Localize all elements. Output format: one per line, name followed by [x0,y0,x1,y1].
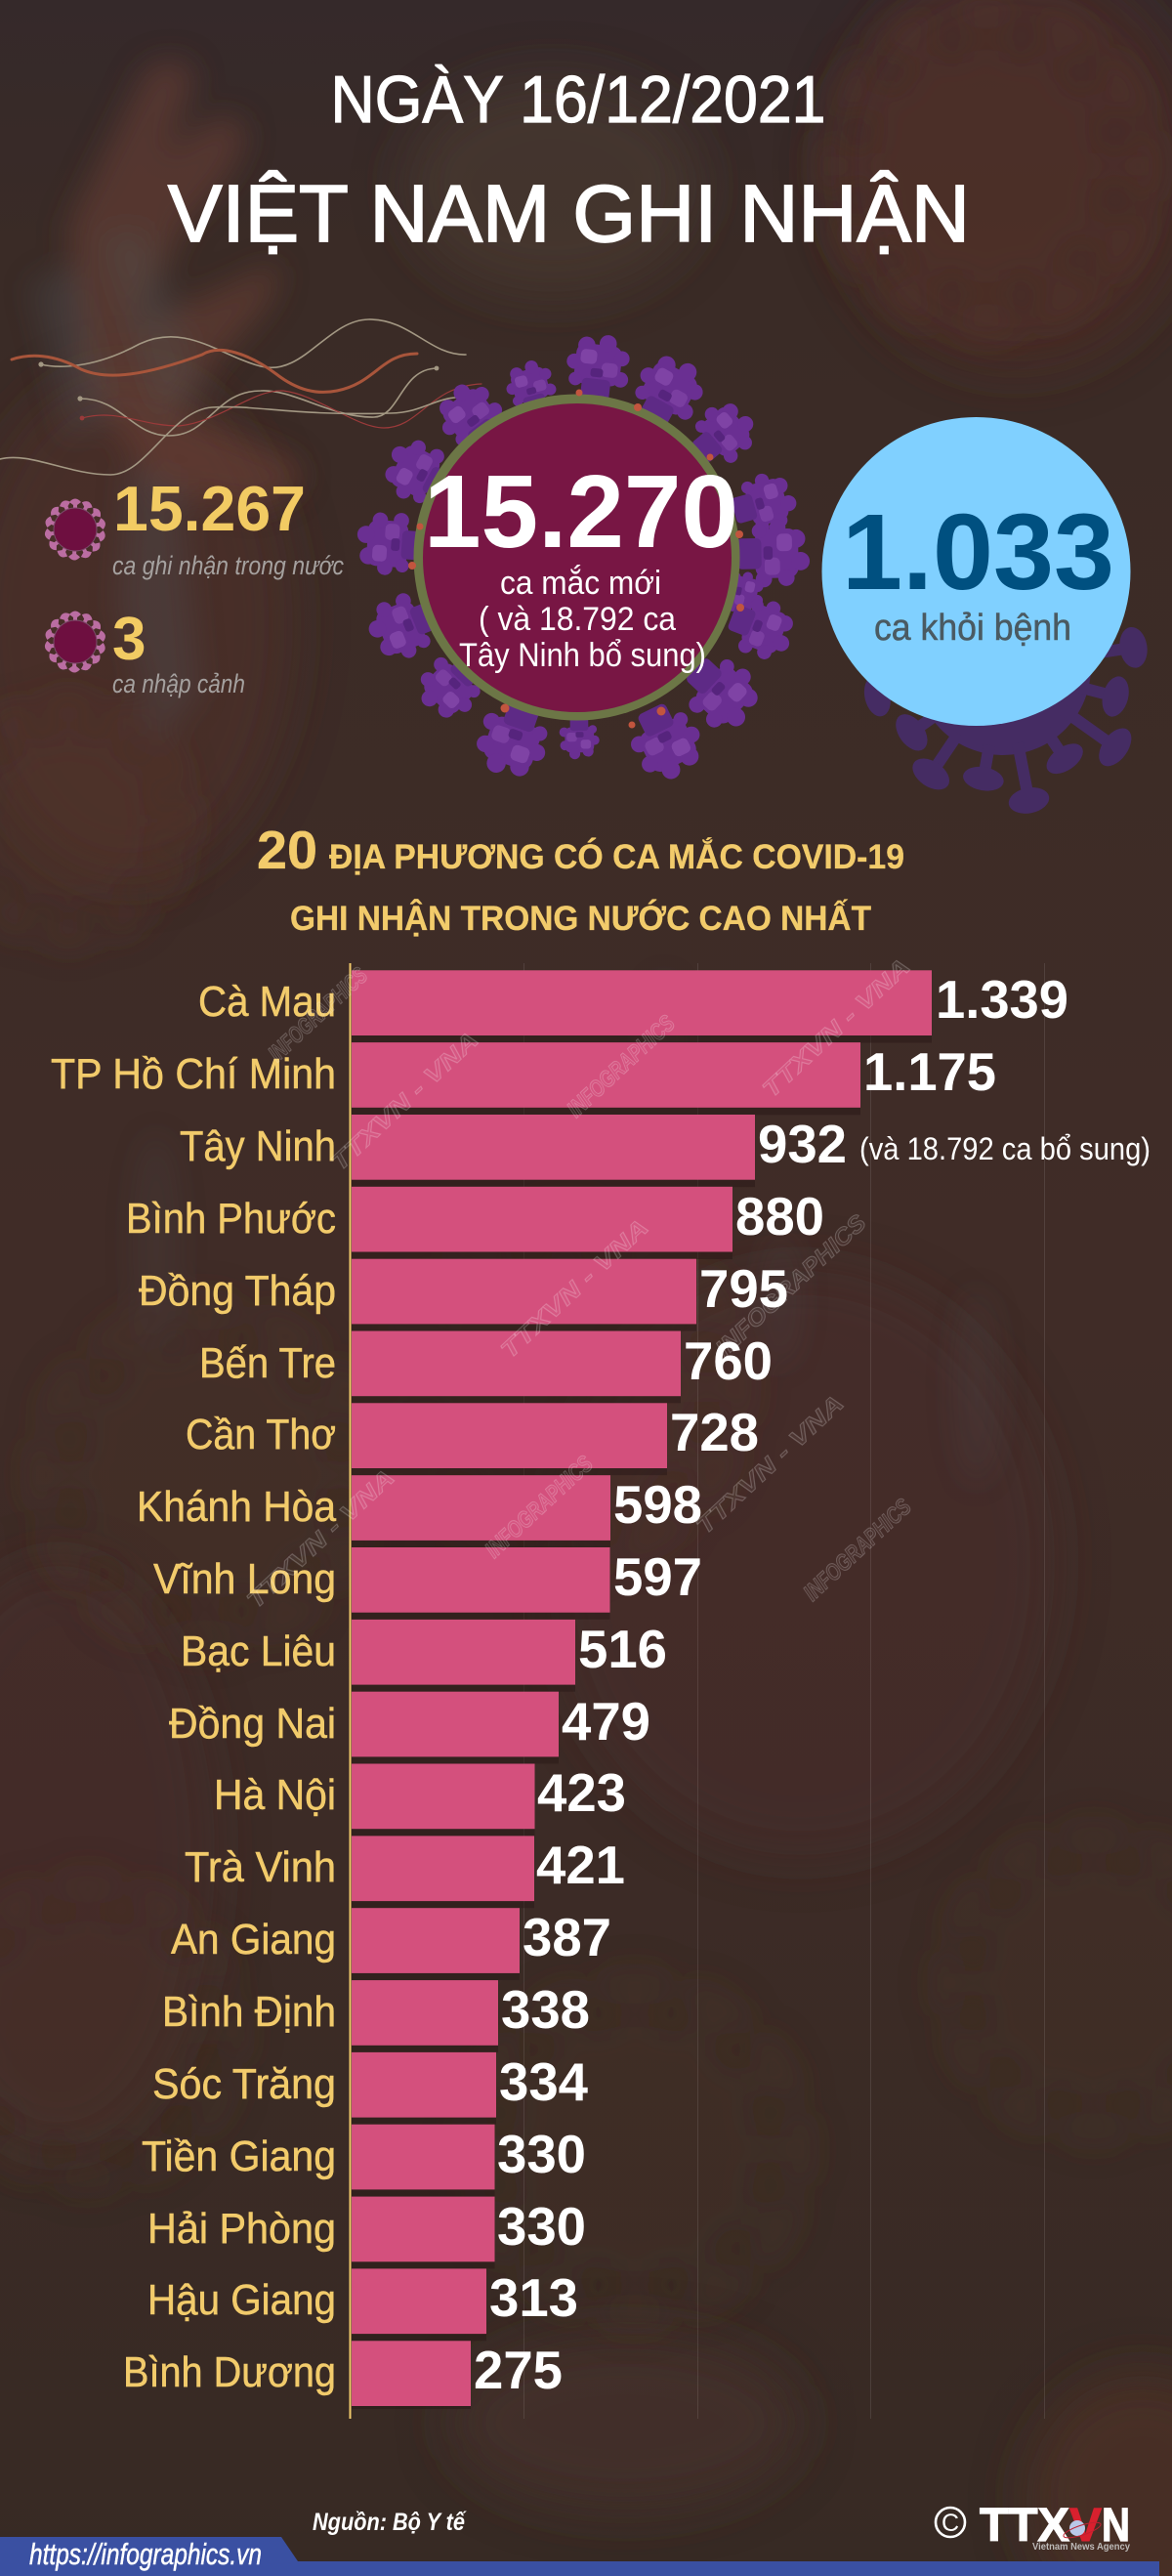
row: Trà Vinh: Trà Vinh [185,1843,336,1891]
chart heading line 1: ĐỊA PHƯƠNG CÓ CA MẮC COVID-19 [329,837,904,876]
agency watermarks: INFOGRAPHICS [563,1010,680,1122]
row: Bến Tre: Bến Tre [199,1339,336,1387]
row: Cần Thơ [186,1402,759,1475]
row: Bình Dương: 275 [474,2340,563,2400]
tagline: Vietnam News Agency [1032,2542,1130,2553]
wordmark: N [1102,2500,1130,2552]
virus spikes [355,331,811,789]
row: Bạc Liêu [181,1619,667,1692]
icon: purple virus silhouette [860,579,1150,817]
row: Hà Nội [214,1762,626,1836]
agency watermarks: TTXVN - VNA [691,1390,849,1540]
row: Bạc Liêu: 516 [578,1619,667,1679]
agency watermarks: INFOGRAPHICS [711,1209,871,1362]
row: An Giang [171,1907,611,1980]
big number: 15.270 [424,454,738,570]
row: Vĩnh Long [153,1546,702,1620]
icon: small virus [44,612,106,673]
row: Bình Định: 338 [501,1979,590,2040]
row: Đồng Nai: 479 [562,1691,650,1752]
main virus with new cases [355,331,811,789]
row: Vĩnh Long: Vĩnh Long [153,1555,336,1603]
row: Bình Phước: 880 [735,1186,824,1246]
row: TP Hồ Chí Minh [51,1041,996,1115]
main title: VIỆT NAM GHI NHẬN [168,168,970,259]
caption line 1: ca mắc mới [500,565,661,602]
row: Cà Mau: 1.339 [936,969,1068,1030]
row: Tây Ninh: 932 [758,1114,847,1174]
source note: Nguồn: Bộ Y tế [313,2509,467,2536]
chart heading line 1 [257,820,904,880]
chart heading line 1: 20 [257,820,317,880]
note: (và 18.792 ca bổ sung) [859,1131,1151,1166]
copyright mark: C [942,2510,959,2537]
row: Bình Định: Bình Định [162,1988,336,2036]
bar chart [51,963,1151,2419]
row: Bến Tre [199,1330,773,1403]
row: Bình Định [162,1979,590,2052]
row: Bình Phước [126,1186,824,1259]
row: Hà Nội: 423 [537,1762,626,1823]
date heading: NGÀY 16/12/2021 [330,63,826,137]
row: Bình Phước: Bình Phước [126,1195,336,1243]
row: Bình Dương: Bình Dương [123,2348,336,2396]
big number: 1.033 [842,492,1114,612]
row: Tây Ninh [180,1114,1151,1187]
row: Đồng Tháp: Đồng Tháp [139,1267,336,1315]
caption line 2: ( và 18.792 ca [479,601,676,638]
row: Hậu Giang: 313 [489,2267,578,2328]
agency watermarks: TTXVN - VNA [242,1464,399,1614]
caption line 3: Tây Ninh bổ sung) [459,637,706,674]
row: Đồng Nai [169,1691,650,1764]
agency watermarks: TTXVN - VNA [758,953,915,1103]
row: Trà Vinh: 421 [536,1835,625,1895]
row: Hậu Giang: Hậu Giang [147,2276,336,2324]
row: TP Hồ Chí Minh: 1.175 [863,1041,996,1102]
wordmark: V [1069,2500,1102,2552]
caption: ca ghi nhận trong nước [112,551,344,580]
row: Tây Ninh: Tây Ninh [180,1122,336,1170]
website url: https://infographics.vn [29,2537,262,2571]
row: Tiền Giang [142,2124,586,2196]
caption: ca khỏi bệnh [874,608,1071,649]
row: Sóc Trăng: Sóc Trăng [152,2060,336,2108]
virus body [423,403,732,712]
wordmark [980,2500,1130,2552]
icon: small virus [44,498,106,561]
virus membrane [414,395,740,721]
agency watermarks: TTXVN - VNA [496,1214,653,1364]
row: Sóc Trăng [152,2051,588,2125]
row: An Giang: An Giang [171,1916,336,1964]
row: An Giang: 387 [523,1907,611,1967]
row: Tiền Giang: 330 [497,2124,586,2184]
row: Cần Thơ: 728 [670,1402,759,1462]
row: Vĩnh Long: 597 [613,1546,702,1607]
row: Bạc Liêu: Bạc Liêu [181,1627,336,1675]
logo: TTXVN [936,2500,1130,2553]
value 15.267: 15.267 [113,473,306,544]
icon: blurred virus top left [68,61,302,508]
row: Đồng Tháp: 795 [699,1258,788,1319]
agency watermarks: INFOGRAPHICS [799,1494,916,1606]
row: Cà Mau [198,969,1068,1043]
wordmark: TTX [980,2500,1069,2552]
row: Bình Dương [123,2340,563,2409]
row: Khánh Hòa [137,1474,702,1547]
agency watermarks: INFOGRAPHICS [264,962,373,1067]
row: Tiền Giang: Tiền Giang [142,2133,336,2180]
row: Khánh Hòa: Khánh Hòa [137,1483,336,1531]
caption: ca nhập cảnh [112,669,245,698]
decorative flowing strands [0,319,481,475]
row: Hậu Giang [147,2267,578,2341]
agency watermarks: INFOGRAPHICS [481,1451,598,1563]
agency watermarks: TTXVN - VNA [326,1027,483,1176]
agency watermarks [242,953,916,1614]
value 3: 3 [112,606,146,673]
row: Hải Phòng [147,2196,586,2268]
chart heading line 2: GHI NHẬN TRONG NƯỚC CAO NHẤT [290,899,871,938]
stat: imported cases [44,606,245,698]
row: Đồng Tháp [139,1258,788,1330]
row: Hải Phòng: 330 [497,2196,586,2257]
row: TP Hồ Chí Minh: TP Hồ Chí Minh [51,1050,336,1098]
row: Cần Thơ: Cần Thơ [186,1411,336,1458]
row: Hà Nội: Hà Nội [214,1771,336,1819]
blue circle [822,417,1131,726]
footer bar [0,2537,1159,2576]
row: Sóc Trăng: 334 [499,2051,588,2112]
row: Đồng Nai: Đồng Nai [169,1700,336,1748]
stat: domestic cases [44,473,344,580]
grid lines and axis [350,963,1045,2419]
row: Hải Phòng: Hải Phòng [147,2205,336,2253]
copyright mark [936,2508,965,2537]
row: Cà Mau: Cà Mau [198,978,336,1026]
row: Bến Tre: 760 [684,1330,773,1391]
row: Khánh Hòa: 598 [613,1474,702,1535]
recovered circle [822,417,1150,817]
membrane proteins [408,389,744,729]
row: Trà Vinh [185,1835,625,1908]
